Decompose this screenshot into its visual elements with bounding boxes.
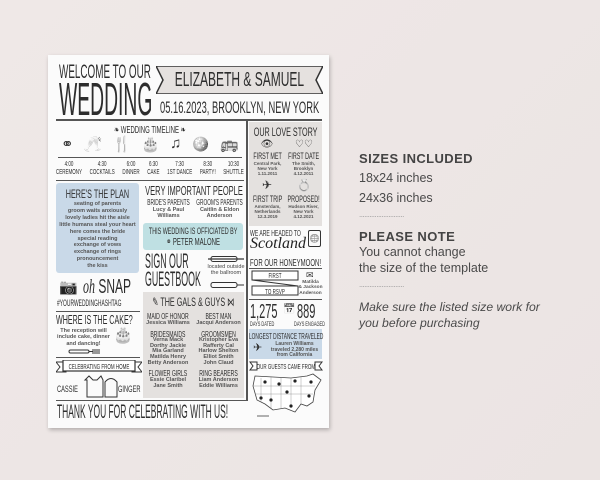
panel: longest distance: Lauren Williams xyxy=(275,341,314,347)
timeline labels: COCKTAILS xyxy=(90,167,115,176)
panel: love story: Brooklyn xyxy=(294,166,313,171)
timeline labels: 1ST DANCE xyxy=(167,167,192,176)
honeymoon: FOR OUR HONEYMOON! xyxy=(250,258,321,269)
panel: very important people: Williams xyxy=(157,213,180,219)
panel: love story: Netherlands xyxy=(254,209,280,214)
days dated / engaged: 📅 xyxy=(283,304,295,315)
panel: love story: New York xyxy=(257,166,278,171)
panel: love story: OUR LOVE STORY xyxy=(254,125,317,139)
rsvp xyxy=(252,270,322,296)
panel: here's the plan: little humans steal your heart xyxy=(59,222,136,228)
panel: here's the plan: the kiss xyxy=(87,263,108,269)
panel: love story: New York xyxy=(293,209,314,214)
rsvp: FIRST xyxy=(268,271,281,280)
timeline icons: 🎂 xyxy=(141,136,160,153)
sign our guestbook: GUESTBOOK xyxy=(145,268,201,291)
panel: the gals & guys: John Claud xyxy=(204,360,233,366)
panel: the gals & guys: ✎ THE GALS & GUYS ⋈ xyxy=(152,295,234,309)
rsvp: TO RSVP xyxy=(265,287,285,296)
panel: here's the plan: HERE'S THE PLAN xyxy=(66,187,129,201)
panel: longest distance xyxy=(249,329,322,359)
info text: sizes included and notes: the size of the template xyxy=(359,261,488,275)
panel: the gals & guys: Harlow Shelton xyxy=(198,348,239,354)
celebrating from home: CELEBRATING FROM HOME xyxy=(69,362,129,371)
banner: names xyxy=(156,66,323,94)
timeline labels: CEREMONY xyxy=(56,167,82,176)
panel: the gals & guys: Elliot Smith xyxy=(203,354,234,360)
panel: here's the plan: lovely ladies hit the aisle xyxy=(65,215,130,221)
panel: the gals & guys: BRIDESMAIDS xyxy=(150,329,185,339)
timeline icons xyxy=(61,135,239,153)
panel: here's the plan: special reading xyxy=(77,236,118,242)
oh snap hashtag xyxy=(57,276,131,308)
sign our guestbook xyxy=(145,250,244,291)
callout: officiant xyxy=(143,223,243,250)
panel: love story: ♡♡ xyxy=(295,139,313,150)
timeline labels: PARTY! xyxy=(200,167,216,176)
callout: officiant: ⚭ PETER MALONE xyxy=(166,237,220,248)
panel: the gals & guys: Mia Garland xyxy=(152,348,184,354)
panel: here's the plan xyxy=(56,183,139,273)
timeline icons: 🚌 xyxy=(220,136,239,153)
panel: the gals & guys xyxy=(143,292,244,398)
timeline xyxy=(56,125,244,176)
panel: love story: FIRST MET xyxy=(253,151,282,161)
panel: the gals & guys: BEST MAN xyxy=(206,311,231,321)
info text: sizes included and notes: .......................... xyxy=(359,280,404,289)
celebrating from home xyxy=(56,360,142,398)
info text: sizes included and notes: You cannot change xyxy=(359,245,466,259)
honeymoon: 🌐 xyxy=(310,234,319,243)
where is the cake: WHERE IS THE CAKE? xyxy=(56,313,133,327)
days dated / engaged: DAYS ENGAGED xyxy=(294,321,325,328)
days dated / engaged: 1,275 xyxy=(250,301,278,323)
panel: very important people: Caitlin & Eldon xyxy=(200,207,239,213)
sign our guestbook: located outside xyxy=(208,264,244,270)
rsvp: Matilda xyxy=(302,280,319,285)
timeline labels xyxy=(56,159,244,176)
timeline icons: ⚭ xyxy=(61,136,74,153)
sign our guestbook: SIGN OUR xyxy=(145,250,189,273)
panel: longest distance: LONGEST DISTANCE TRAVELED xyxy=(249,332,323,341)
timeline labels: 10:30 xyxy=(228,159,239,168)
panel: here's the plan: here comes the bride xyxy=(70,229,125,235)
panel: love story: 1.11.2011 xyxy=(258,171,277,176)
panel: the gals & guys: Liam Anderson xyxy=(199,377,238,383)
panel: very important people: Lucy & Paul xyxy=(153,207,184,213)
honeymoon: WE ARE HEADED TO xyxy=(250,228,301,238)
panel: longest distance: ✈ xyxy=(253,342,262,354)
panel: the gals & guys: Kristopher Eva xyxy=(199,337,238,343)
timeline labels: 6:30 xyxy=(149,159,158,168)
panel: love story: The Smith, xyxy=(292,161,315,166)
celebrating from home: GINGER xyxy=(118,384,140,395)
panel: the gals & guys: Essie Claribel xyxy=(150,377,186,383)
info text: sizes included and notes: PLEASE NOTE xyxy=(359,229,455,244)
timeline icons: ♫ xyxy=(170,135,181,152)
panel: the gals & guys: GROOMSMEN xyxy=(201,329,236,339)
timeline labels: 4:30 xyxy=(98,159,107,168)
rsvp: & Jackson xyxy=(298,285,322,290)
info text: sizes included and notes: .......................... xyxy=(359,210,404,219)
where is the cake: include cake, dinner xyxy=(57,334,110,340)
panel: the gals & guys: Matilda Henry xyxy=(150,354,186,360)
panel: here's the plan: exchange of rings xyxy=(74,249,121,255)
panel: love story: ✈ xyxy=(262,178,272,192)
rsvp: ✉ xyxy=(306,270,314,280)
panel: here's the plan: exchange of vows xyxy=(74,242,121,248)
timeline labels: 6:00 xyxy=(127,159,135,168)
panel: love story: Amsterdam, xyxy=(254,204,280,209)
panel: love story: FIRST TRIP xyxy=(253,194,282,204)
panel: love story: 12.3.2019 xyxy=(257,214,278,219)
days dated / engaged: DAYS DATED xyxy=(250,321,274,328)
oh snap hashtag: oh SNAP xyxy=(83,276,131,298)
panel: the gals & guys: Betty Anderson xyxy=(148,360,188,366)
callout: officiant: THIS WEDDING IS OFFICIATED BY xyxy=(149,226,237,236)
info text: sizes included and notes: Make sure the listed size work for xyxy=(359,300,540,314)
timeline labels: DINNER xyxy=(122,167,140,176)
info text: sizes included and notes: 18x24 inches xyxy=(359,171,433,185)
panel: the gals & guys: Jacqui Anderson xyxy=(196,320,241,326)
panel: love story: Central Park, xyxy=(254,161,281,166)
panel: the gals & guys: Eddie Williams xyxy=(199,383,238,389)
title: welcome to our wedding: WELCOME TO OUR xyxy=(59,62,151,83)
timeline labels: 7:30 xyxy=(175,159,184,168)
panel: very important people: GROOM'S PARENTS xyxy=(196,198,243,207)
sign our guestbook: the ballroom xyxy=(211,270,241,276)
timeline labels: SHUTTLE xyxy=(223,167,244,176)
panel: longest distance: traveled 2,280 miles xyxy=(271,347,318,353)
panel: the gals & guys: MAID OF HONOR xyxy=(147,311,189,321)
where is the cake: and dancing! xyxy=(66,341,101,347)
panel: love story: FIRST DATE xyxy=(288,151,319,161)
panel: the gals & guys: RING BEARERS xyxy=(199,368,238,378)
oh snap hashtag: #YOURWEDDINGHASHTAG xyxy=(57,298,121,308)
where is the cake: The reception will xyxy=(60,328,107,334)
guests came from map: OUR GUESTS CAME FROM xyxy=(257,362,315,371)
panel: here's the plan: seating of parents xyxy=(74,201,121,207)
oh snap hashtag: 📷 xyxy=(59,279,78,296)
thank you message: THANK YOU FOR CELEBRATING WITH US! xyxy=(57,402,228,423)
honeymoon xyxy=(250,228,321,269)
days dated / engaged: 889 xyxy=(297,301,315,323)
title: welcome to our wedding: WEDDING xyxy=(59,73,152,125)
where is the cake: 🎂 xyxy=(113,327,133,344)
panel: longest distance: from California xyxy=(277,352,312,358)
panel: very important people xyxy=(145,184,243,219)
celebrating from home: CASSIE xyxy=(57,384,78,395)
banner: names: ELIZABETH & SAMUEL xyxy=(175,69,304,91)
panel: the gals & guys: Verna Mack xyxy=(153,337,183,343)
panel: love story: 💍 xyxy=(297,178,311,192)
panel: the gals & guys: FLOWER GIRLS xyxy=(149,368,187,378)
panel: very important people: BRIDE'S PARENTS xyxy=(147,198,190,207)
panel: love story: 👁 xyxy=(261,139,273,150)
timeline labels: 8:30 xyxy=(203,159,212,168)
days dated / engaged xyxy=(250,301,325,328)
info text: sizes included and notes: SIZES INCLUDED xyxy=(359,151,473,166)
panel: very important people: Anderson xyxy=(207,213,232,219)
panel: the gals & guys: Jessica Williams xyxy=(146,320,190,326)
panel: the gals & guys: Dorthy Jackie xyxy=(150,343,186,349)
timeline heading: ❧ WEDDING TIMELINE ❧ xyxy=(114,125,186,136)
panel: love story xyxy=(249,122,322,226)
timeline labels: 4:00 xyxy=(65,159,73,168)
timeline labels: CAKE xyxy=(147,167,159,176)
timeline icons: 🥂 xyxy=(84,136,102,153)
info text: sizes included and notes: 24x36 inches xyxy=(359,191,433,205)
panel: love story: 4.12.2021 xyxy=(293,214,314,219)
honeymoon: Scotland xyxy=(250,235,306,252)
timeline icons: 🍴 xyxy=(112,136,131,153)
where is the cake xyxy=(56,313,133,354)
panel: love story: PROPOSED! xyxy=(288,194,320,204)
info text: sizes included and notes: you before purchasing xyxy=(359,316,480,330)
panel: the gals & guys: Rafferty Cal xyxy=(203,343,234,349)
panel: here's the plan: pronouncement xyxy=(77,256,118,262)
poster xyxy=(48,55,329,428)
panel: love story: Hudson River, xyxy=(288,204,319,209)
panel: here's the plan: groom waits anxiously xyxy=(68,208,127,214)
panel: very important people: VERY IMPORTANT PEOPLE xyxy=(145,184,243,198)
timeline icons: 🪩 xyxy=(191,136,210,153)
panel: love story: 4.12.2011 xyxy=(294,171,313,176)
info text: sizes included and notes xyxy=(358,151,540,330)
guests came from map xyxy=(249,362,323,416)
panel: the gals & guys: Jane Smith xyxy=(153,383,183,389)
rsvp: Anderson xyxy=(299,291,322,296)
date and location: 05.16.2023, BROOKLYN, NEW YORK xyxy=(160,98,319,117)
